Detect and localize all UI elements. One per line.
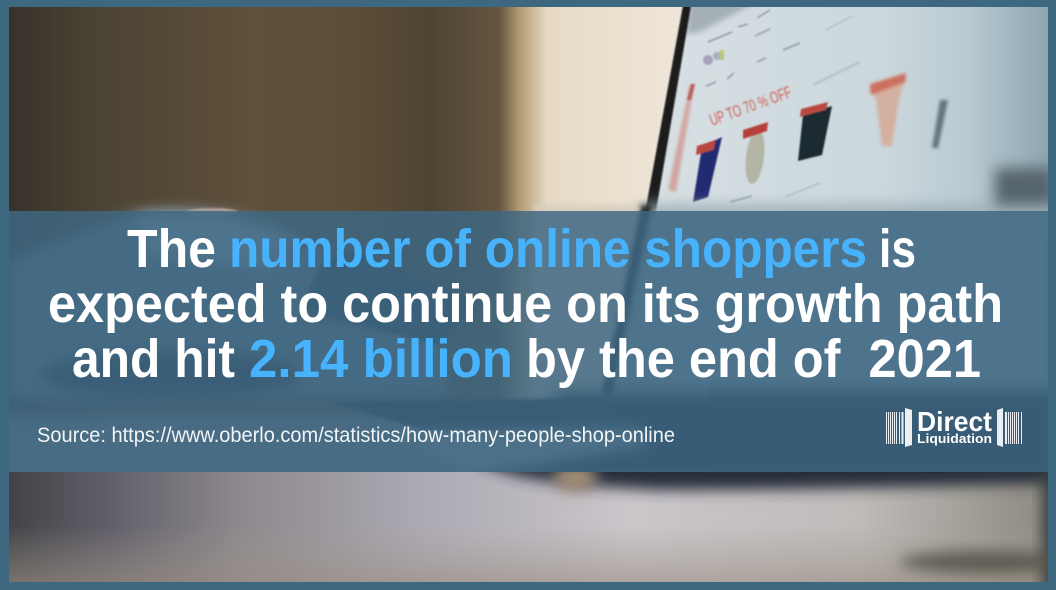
photo: table strip	[9, 472, 1048, 582]
photo: hand	[9, 211, 450, 400]
translucent text band	[9, 211, 1048, 472]
headline line 3: and hit	[72, 329, 235, 389]
photo: keyboard	[342, 398, 558, 430]
photo: laptop bezel	[646, 7, 692, 211]
photo: side red mark	[687, 84, 695, 100]
table: right olive shadow	[900, 551, 1056, 573]
headline line 3: 2.14 billion	[249, 329, 513, 389]
photo: watch tag	[743, 122, 768, 139]
photo: laptop screen under band	[600, 205, 1056, 395]
photo: laptop screen	[658, 7, 1048, 211]
photo: promo text: UP TO 70 % OFF	[707, 82, 794, 130]
headline line 1: number of online shoppers	[229, 219, 867, 279]
photo: phone product	[693, 137, 722, 202]
source citation: Source: https://www.oberlo.com/statistics/how-many-people-shop-online	[37, 424, 675, 447]
photo: hand shadow	[49, 354, 291, 393]
photo: dark slim product	[932, 100, 948, 148]
photo: screen header shade	[686, 7, 752, 36]
photo: dark product	[798, 106, 832, 161]
photo: screen right shade	[995, 168, 1055, 223]
logo: wordmark Direct: Direct	[917, 406, 992, 437]
headline line 2: expected to continue on its growth path	[48, 274, 1003, 334]
photo: laptop base dark	[508, 388, 1048, 472]
table: right dark corner	[1033, 472, 1048, 582]
photo: fingertip	[186, 207, 238, 213]
photo: watch product	[744, 132, 766, 184]
photo: laptop base light	[474, 427, 645, 472]
table: bottom tone	[9, 533, 990, 582]
photo: store logo	[703, 50, 724, 65]
headline line 1: The	[127, 219, 216, 279]
photo: cream wall under band	[530, 205, 640, 395]
photo: phone tag	[696, 140, 716, 155]
photo: site header smudges	[706, 10, 860, 202]
photo: red product	[871, 76, 906, 146]
logo: wordmark Liquidation: Liquidation	[917, 431, 992, 446]
photo: table under band, left	[9, 416, 456, 472]
logo: Direct Liquidation	[886, 406, 1022, 447]
headline line 3: by the end of 2021	[526, 329, 981, 389]
table: dark laptop shadow	[476, 472, 1048, 502]
logo: left barcode	[886, 408, 912, 447]
table: tan reflection	[553, 464, 597, 492]
photo: red product top	[870, 73, 906, 95]
photo: laptop bezel under band	[600, 205, 652, 395]
photo: dark product tag	[800, 102, 828, 117]
headline	[48, 219, 1003, 389]
photo: credit card	[307, 259, 439, 342]
logo: right barcode	[997, 408, 1022, 447]
headline line 1: is	[879, 219, 916, 279]
photo: wall	[9, 7, 684, 414]
photo: side red text	[668, 84, 694, 192]
photo: hand highlight	[132, 203, 274, 260]
